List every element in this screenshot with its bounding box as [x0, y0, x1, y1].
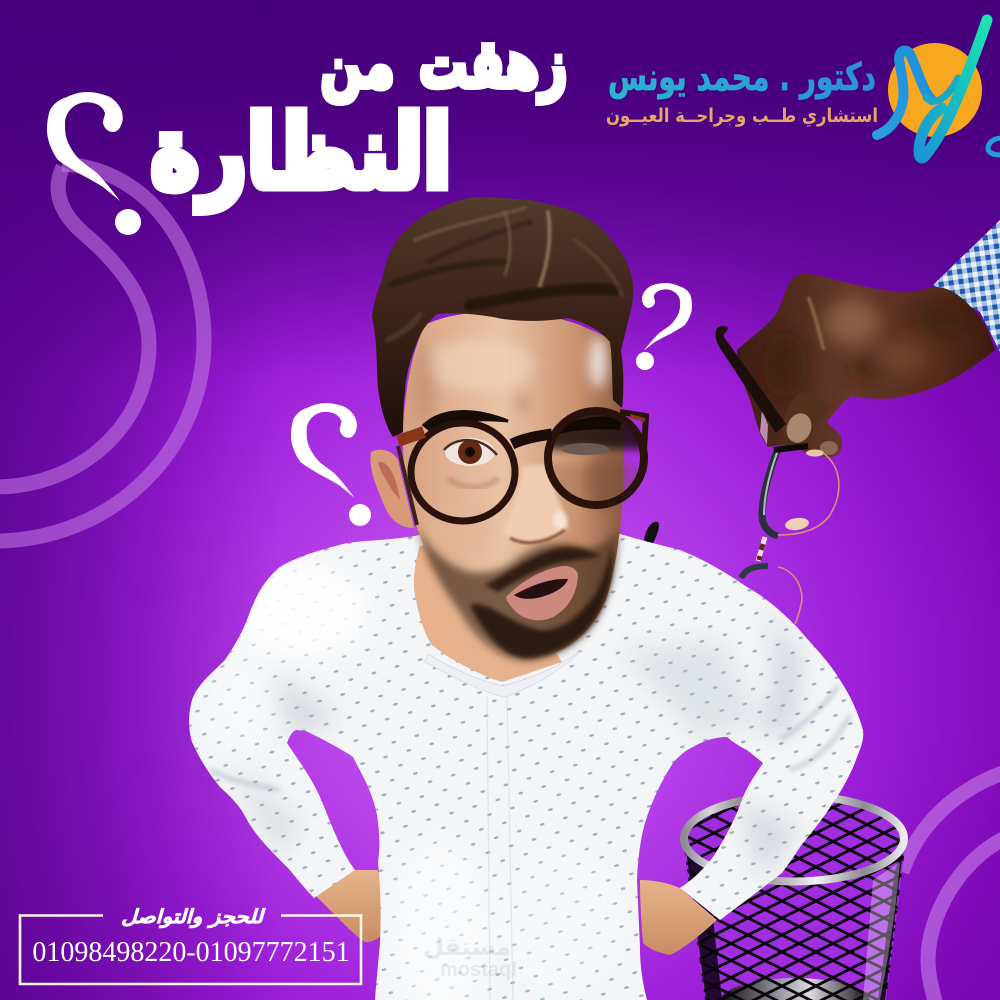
mouth	[506, 566, 578, 620]
glasses bridge	[758, 537, 765, 561]
ear inner	[378, 462, 400, 500]
basket reflection	[863, 862, 900, 1000]
shirt cuff	[933, 220, 1000, 352]
icon: right question mark	[636, 283, 692, 370]
shirt	[189, 533, 863, 1000]
contact box	[20, 906, 361, 984]
sleeve folds	[210, 685, 850, 790]
hair	[372, 197, 633, 437]
watermark	[423, 933, 517, 981]
face shading	[413, 336, 626, 554]
right eyebrow	[552, 417, 622, 436]
basket body	[684, 848, 905, 1000]
logo	[606, 20, 1000, 158]
small temple tip	[644, 522, 659, 545]
decorative rings left	[0, 164, 204, 541]
pale fingertip	[806, 450, 824, 456]
icon: middle question mark	[291, 403, 371, 526]
neck	[414, 545, 562, 682]
hand	[737, 274, 995, 457]
hand shading	[763, 300, 968, 399]
beard core	[470, 548, 613, 658]
left eyebrow	[424, 412, 508, 430]
face	[403, 312, 623, 660]
finger nail	[820, 441, 838, 455]
decorative rings bottom right	[902, 772, 1000, 1000]
doctor title: استشاري طــب وجراحــة العيــون	[606, 105, 878, 128]
basket floor	[720, 978, 870, 1000]
left hand	[316, 870, 390, 942]
right lens shadow	[552, 415, 640, 501]
contact box frame	[20, 916, 361, 984]
icon: wastebasket	[684, 794, 905, 1000]
hand holding glasses	[716, 220, 1000, 624]
index nail	[760, 410, 768, 445]
left eye	[444, 438, 498, 487]
heading: line two: النظارة	[150, 94, 452, 211]
collar	[425, 650, 582, 697]
second lens frame	[741, 566, 768, 578]
phone numbers: 01098498220-01097772151	[32, 937, 350, 968]
ear	[370, 450, 414, 528]
shirt placket	[487, 697, 513, 1000]
right hand	[640, 880, 717, 955]
man	[189, 197, 863, 1000]
shirt shading	[205, 560, 850, 1000]
glasses lens frame	[762, 448, 778, 536]
heading: line one: زهقت من	[320, 26, 568, 103]
doctor name: دكتور . محمد يونس	[608, 55, 876, 99]
watermark: مستقل	[423, 933, 511, 961]
watermark: mostaql	[440, 959, 517, 981]
knuckle crease	[808, 297, 824, 350]
nostril shadow	[510, 530, 565, 543]
nose tip highlight	[553, 511, 567, 529]
logo emblem	[877, 20, 1000, 158]
moustache	[485, 547, 600, 592]
beard stubble	[418, 525, 618, 661]
icon: large question mark	[47, 92, 141, 235]
nose	[502, 465, 568, 542]
basket rim	[684, 796, 904, 882]
nose pad	[784, 516, 810, 532]
basket mesh	[684, 794, 905, 1000]
hair highlights	[388, 208, 622, 340]
thumb	[782, 392, 830, 442]
thumb nail	[783, 410, 815, 446]
glasses	[398, 411, 646, 525]
contact heading: للحجز والتواصل	[121, 906, 267, 928]
glasses temple	[716, 326, 786, 433]
